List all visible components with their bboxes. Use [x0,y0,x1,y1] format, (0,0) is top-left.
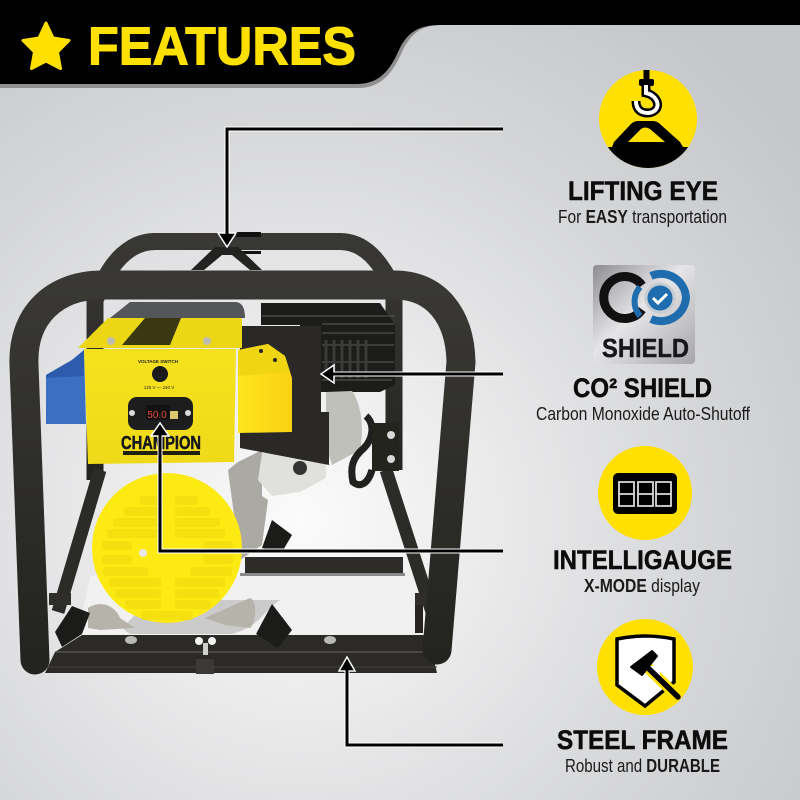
callout arrow: intelligauge [151,423,503,551]
decal [122,318,181,345]
floor [78,576,422,636]
rear frame [49,232,441,633]
digital display [128,397,193,430]
text: steel frame description: Robust and DURABLE [565,756,720,776]
base plate [45,635,437,674]
lifting eye bracket [191,247,262,270]
icon: intelligauge [598,446,692,540]
voltage switch: VOLTAGE SWITCH [138,359,178,364]
alternator dome [92,473,242,623]
engine mounts [55,520,292,648]
icon: star [23,23,69,68]
heading: co2 shield: CO² SHIELD [573,373,712,403]
yellow outlet [238,344,292,433]
icon: steel frame [597,619,693,715]
callout arrow: steel frame [339,657,503,745]
black mounting panel [240,326,329,465]
text: co shield description: Carbon Monoxide Auto-Shutoff [536,404,751,424]
brand: CHAMPION [121,432,201,453]
generator illustration [24,232,461,674]
front frame [24,285,461,660]
recoil handle [352,416,399,485]
callout arrow: co shield [321,365,503,383]
blue outlet [46,350,86,424]
heading: intelligauge: INTELLIGAUGE [553,545,732,575]
control box [78,318,242,464]
text: lifting eye description: For EASY transportation [558,207,727,227]
air filter cage [261,303,395,392]
header banner [0,0,800,88]
voltage switch [138,359,178,390]
icon: lifting eye [599,70,697,168]
callout arrow: lifting eye [218,129,503,247]
rear base rail [240,557,405,576]
digital display: 50.0 [147,410,167,421]
engine top [110,302,245,318]
silver engine block [228,391,362,560]
icon: co shield: SHIELD [602,333,689,363]
heading: features: FEATURES [88,16,356,76]
heading: lifting eye: LIFTING EYE [568,176,718,206]
icon: co shield [593,265,695,364]
heading: steel frame: STEEL FRAME [557,725,728,755]
text: intelligauge description: X-MODE display [584,576,700,596]
voltage switch: 120 V — 240 V [144,385,174,390]
